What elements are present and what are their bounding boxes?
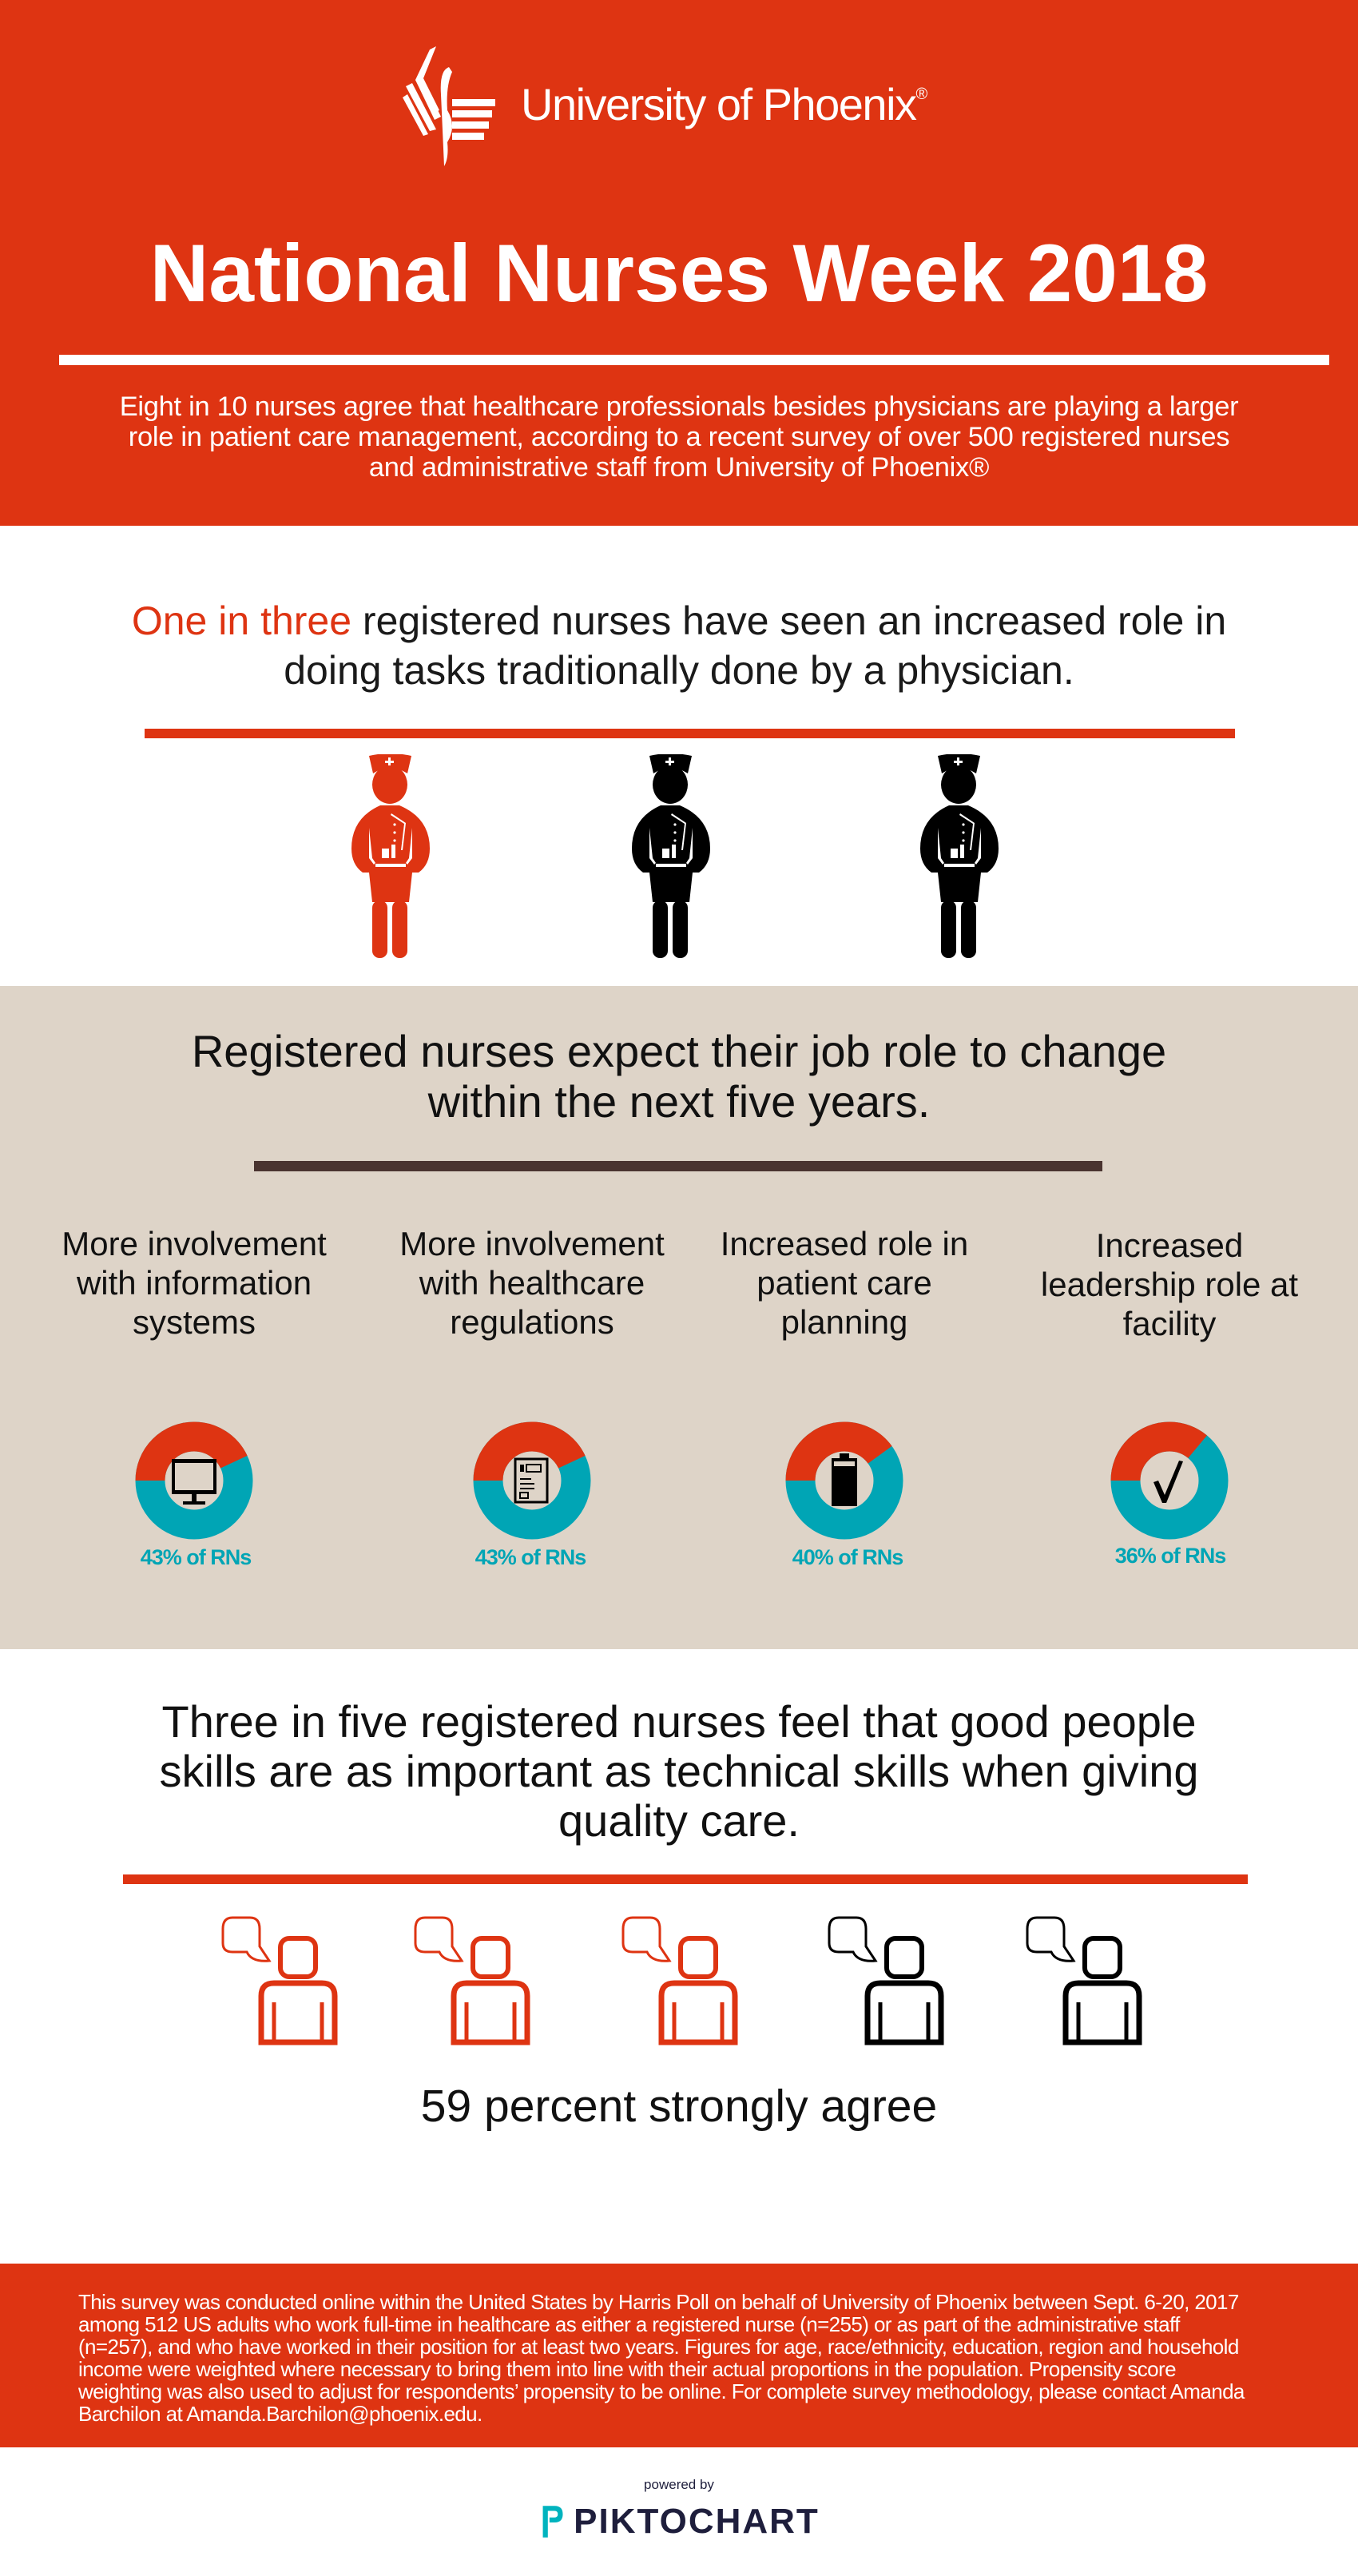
footer: methodology: among 512 US adults who work full-time in healthcare as either a registered nurse (n=255) or as part of the administrative staff bbox=[78, 2312, 1180, 2336]
column labels: systems bbox=[133, 1303, 256, 1341]
intro text: and administrative staff from University of Phoenix® bbox=[369, 452, 989, 483]
footer: methodology bbox=[0, 2264, 1358, 2447]
donut 1: 43% bbox=[150, 1437, 238, 1525]
heading: Registered nurses expect their job role to change bbox=[192, 1026, 1166, 1076]
header panel bbox=[0, 0, 1358, 526]
panel: job role change: regulations bbox=[450, 1303, 614, 1341]
column labels: More involvement bbox=[62, 1225, 327, 1262]
percentage labels: 43% of RNs bbox=[475, 1545, 586, 1569]
panel: job role change: leadership role at bbox=[1041, 1266, 1298, 1303]
percentage labels: 36% of RNs bbox=[1115, 1544, 1225, 1568]
panel: job role change bbox=[0, 986, 1358, 1649]
intro text: Eight in 10 nurses agree that healthcare professionals besides physicians are playing a larger bbox=[120, 392, 1238, 422]
title: National Nurses Week 2018 bbox=[150, 228, 1208, 319]
icon: phoenix bbox=[403, 46, 495, 166]
heading: people skills bbox=[160, 1696, 1198, 1846]
column labels: with information bbox=[77, 1264, 312, 1302]
panel: job role change: patient care bbox=[756, 1264, 932, 1302]
logo bbox=[403, 46, 927, 166]
heading: one in three bbox=[132, 598, 1226, 693]
donut 4: 36% bbox=[1126, 1437, 1213, 1525]
people icons bbox=[222, 1916, 1142, 2045]
heading: one in three: doing tasks traditionally done by a physician. bbox=[284, 648, 1074, 693]
column labels bbox=[62, 1225, 327, 1341]
donut 2: 43% bbox=[488, 1437, 576, 1525]
icon: piktochart bbox=[543, 2506, 562, 2538]
heading bbox=[192, 1026, 1166, 1127]
panel: job role change: More involvement bbox=[399, 1225, 665, 1262]
heading: within the next five years. bbox=[428, 1076, 930, 1127]
heading: people skills: Three in five registered nurses feel that good people bbox=[161, 1696, 1197, 1747]
panel: job role change: Increased role in bbox=[721, 1225, 968, 1262]
nurse icons bbox=[351, 754, 999, 958]
footer: methodology: Barchilon at Amanda.Barchilon@phoenix.edu. bbox=[78, 2402, 482, 2426]
heading: people skills: quality care. bbox=[558, 1795, 800, 1846]
powered by piktochart: powered by bbox=[644, 2477, 714, 2492]
footer: methodology: income were weighted where necessary to bring them into line with their actual proportions in the population. Propensity score bbox=[78, 2357, 1176, 2381]
powered by piktochart: PIKTOCHART bbox=[574, 2502, 820, 2541]
panel: job role change: facility bbox=[1123, 1305, 1216, 1342]
percentage labels bbox=[141, 1544, 1225, 1569]
footer: methodology: weighting was also used to adjust for respondents’ propensity to be online. For complete survey methodology, please contact Amanda bbox=[78, 2379, 1245, 2403]
intro text: role in patient care management, according to a recent survey of over 500 registered nurses bbox=[129, 422, 1229, 452]
percentage labels: 40% of RNs bbox=[792, 1545, 903, 1569]
panel: job role change: planning bbox=[781, 1303, 907, 1341]
panel: job role change: with healthcare bbox=[419, 1264, 645, 1302]
logo text: University of Phoenix® bbox=[521, 79, 927, 129]
intro text bbox=[120, 392, 1238, 483]
powered by piktochart bbox=[543, 2477, 820, 2541]
percentage labels: 43% of RNs bbox=[141, 1545, 251, 1569]
stat text: 59 percent strongly agree bbox=[421, 2081, 937, 2132]
heading: people skills: skills are as important as technical skills when giving bbox=[160, 1746, 1198, 1796]
footer: methodology: (n=257), and who have worked in their position for at least two years. Figures for age, race/ethnicity, education, region and household bbox=[78, 2335, 1239, 2359]
donut 3: 40% bbox=[800, 1437, 888, 1525]
footer: methodology: This survey was conducted online within the United States by Harris Poll on behalf of University of Phoenix between Sept. 6-20, 2017 bbox=[78, 2290, 1239, 2314]
donut charts bbox=[136, 1422, 1229, 1569]
panel: job role change: Increased bbox=[1096, 1226, 1243, 1264]
heading: one in three: One in three registered nurses have seen an increased role in bbox=[132, 598, 1226, 643]
